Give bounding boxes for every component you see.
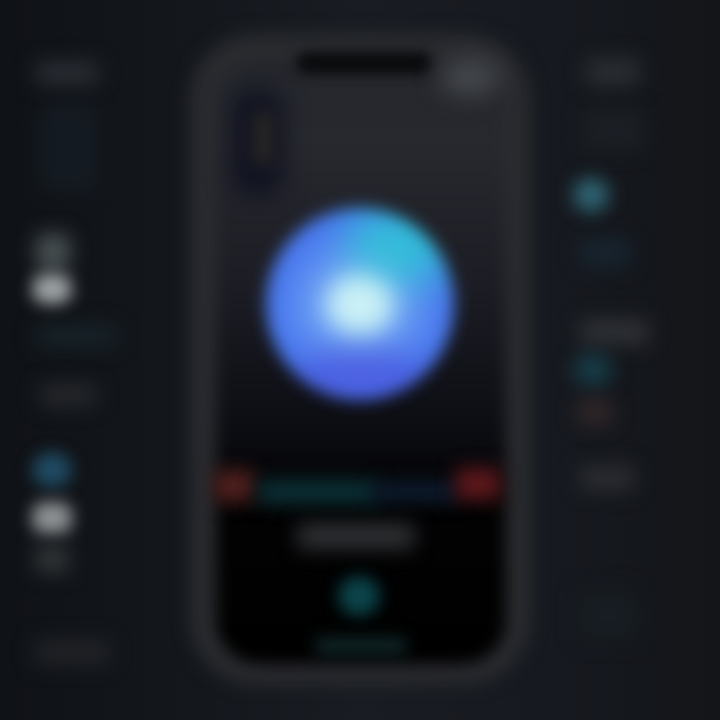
right heading (586, 58, 640, 86)
status icon (230, 88, 284, 198)
sidebar label (36, 325, 116, 347)
sidebar white icon (32, 502, 72, 534)
sidebar grey item (36, 546, 68, 572)
status icon detail (254, 112, 272, 164)
red left segment (214, 470, 254, 502)
top-right highlight (440, 58, 500, 96)
orb violet base (294, 350, 426, 400)
orb teal highlight (346, 202, 456, 286)
right footer text (578, 590, 638, 640)
sidebar blue icon (32, 452, 72, 488)
right teal icon (574, 354, 612, 386)
sidebar bright icon (32, 274, 72, 304)
sidebar footer (34, 640, 110, 664)
phone frame (190, 34, 530, 684)
sidebar list items (38, 102, 98, 192)
sidebar toggle icon (36, 234, 70, 270)
sidebar heading (36, 62, 98, 84)
right lower heading (580, 466, 634, 490)
notch (296, 52, 432, 74)
teal segment (258, 480, 378, 504)
right sidebar panel (564, 55, 650, 493)
right blue icon (573, 178, 609, 212)
navy segment (374, 482, 458, 502)
right item label (580, 240, 630, 266)
colour bar (206, 457, 510, 512)
left sidebar panel (21, 57, 110, 664)
right subheading (580, 320, 648, 344)
teal button icon (338, 576, 380, 616)
phone screen (216, 58, 506, 664)
home indicator (316, 638, 406, 654)
right red icon (576, 398, 614, 426)
central glowing orb (266, 208, 454, 400)
sidebar subheading (40, 384, 96, 406)
phone caption (298, 524, 414, 548)
phone body (187, 32, 532, 686)
right list text (584, 110, 644, 150)
red right segment (456, 468, 500, 500)
orb inner core (328, 278, 392, 328)
